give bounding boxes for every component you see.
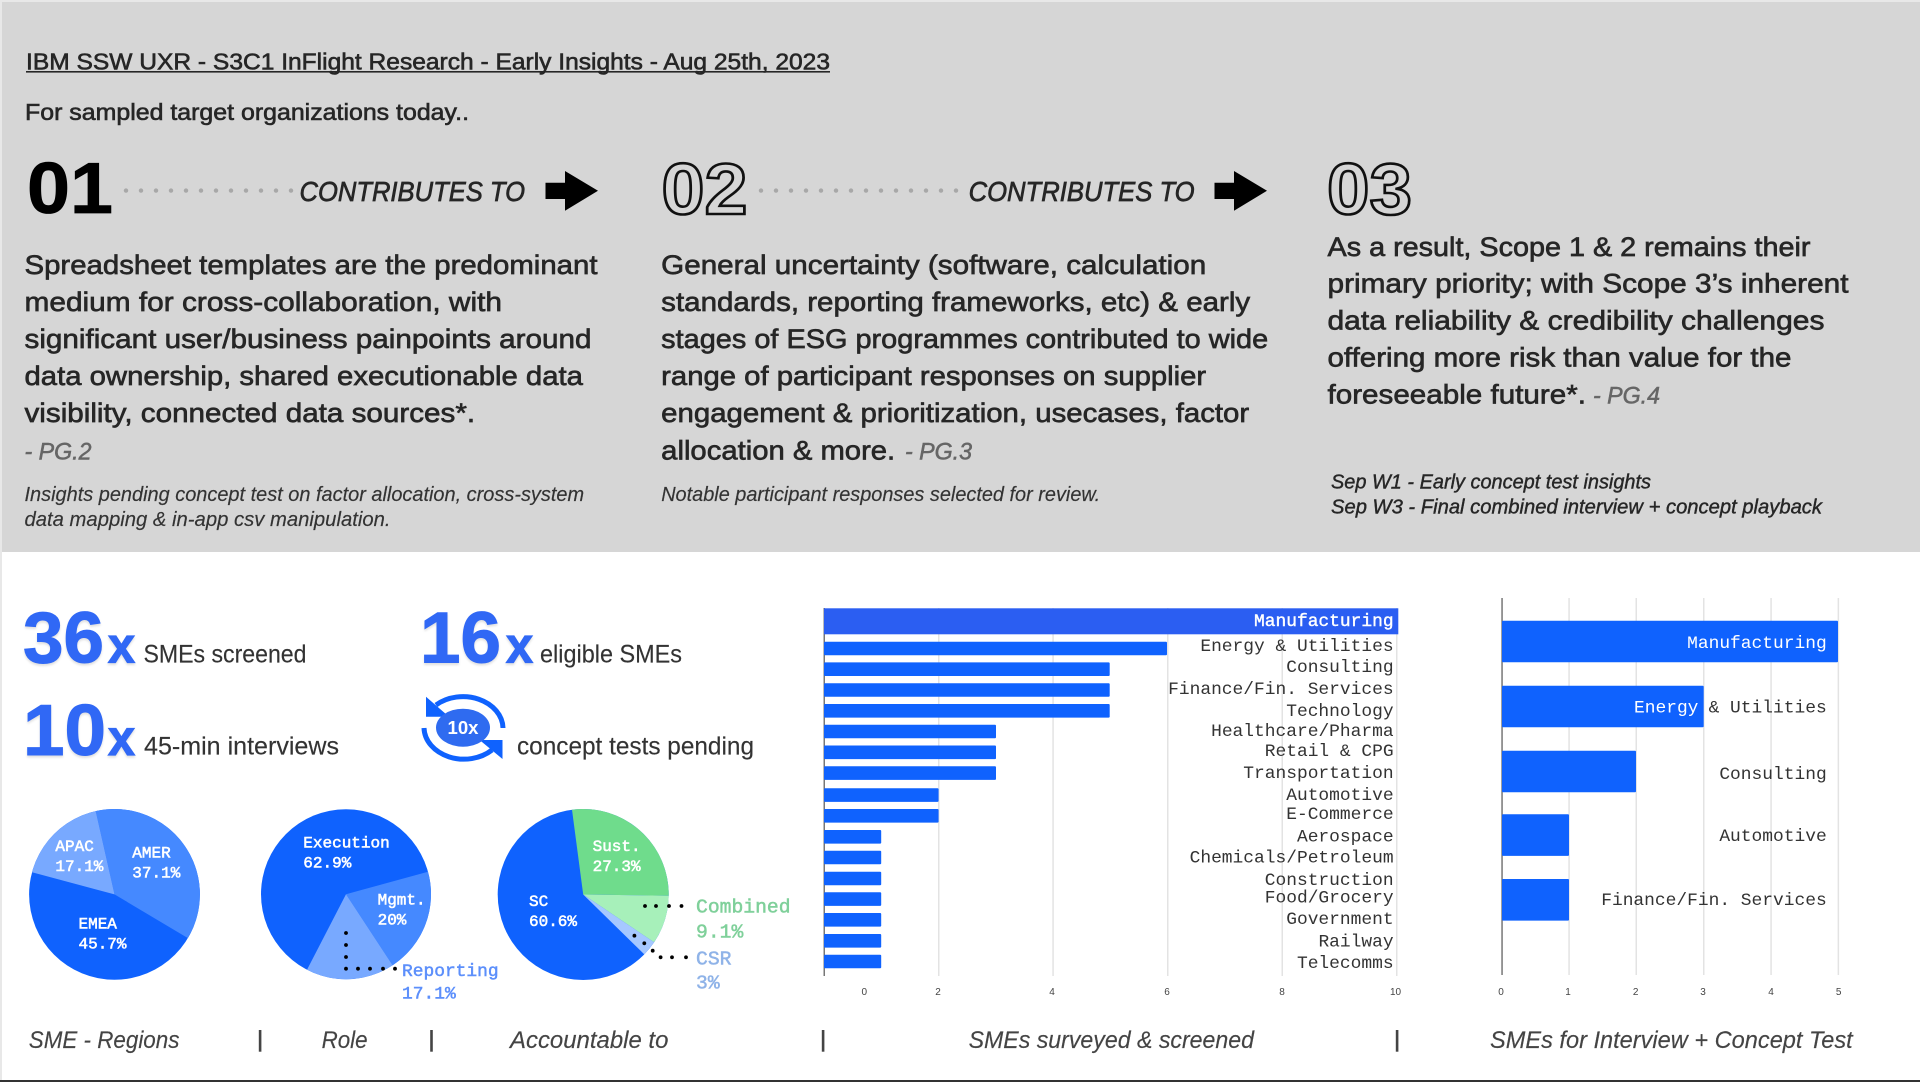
- bar chart: SMEs for interview and concept test: Manufacturing: [1687, 634, 1827, 654]
- step 02 body: range of participant responses on supplier: [661, 361, 1206, 391]
- bar chart: SMEs surveyed and screened: Construction: [1265, 871, 1394, 891]
- step 03 body: data reliability & credibility challenges: [1328, 306, 1824, 336]
- panel: key insights: [2, 2, 1920, 552]
- step 01 note: [24, 484, 584, 531]
- bar chart: SMEs for interview and concept test: 2: [1633, 987, 1639, 998]
- bar chart: SMEs surveyed and screened: Energy & Utilities: [1200, 637, 1394, 657]
- pie chart: role: [261, 809, 499, 1004]
- pie chart: accountable to: [498, 809, 791, 994]
- pie chart: role: Reporting: [402, 962, 499, 982]
- step 01 body: [24, 250, 598, 466]
- stat: interviews: 45-min interviews: [144, 732, 339, 760]
- bar chart: SMEs surveyed and screened: 6: [1164, 987, 1170, 998]
- stat: interviews: x: [108, 710, 135, 766]
- contributes to label: CONTRIBUTES TO: [300, 176, 525, 207]
- bar chart: SMEs surveyed and screened: Government: [1286, 910, 1394, 930]
- number 02: 02: [662, 150, 748, 230]
- pie chart: SME regions: EMEA: [78, 915, 117, 933]
- step 02 body: stages of ESG programmes contributed to wide: [661, 324, 1268, 354]
- step 01 header: [27, 149, 598, 229]
- bar chart: SMEs surveyed and screened: Railway: [1318, 932, 1394, 952]
- pie chart: role: 62.9%: [303, 854, 352, 872]
- chart captions: SMEs for Interview + Concept Test: [1490, 1027, 1854, 1054]
- step 01 body: significant user/business painpoints around: [24, 324, 592, 354]
- bar chart: SMEs for interview and concept test: [1498, 598, 1842, 998]
- bar chart: SMEs surveyed and screened: 4: [1049, 987, 1055, 998]
- chart captions: Role: [322, 1027, 368, 1054]
- step 02 body: General uncertainty (software, calculation: [661, 250, 1206, 280]
- pie chart: SME regions: AMER: [132, 844, 171, 862]
- step 01 note: Insights pending concept test on factor allocation, cross-system: [24, 484, 584, 506]
- step 02 body: - PG.3: [905, 438, 973, 466]
- step 02 body: engagement & prioritization, usecases, factor: [661, 398, 1249, 428]
- chart captions: [29, 1027, 1854, 1054]
- bar chart: SMEs surveyed and screened: E-Commerce: [1286, 805, 1394, 825]
- stat: SMEs screened: [23, 599, 306, 679]
- stat: eligible SMEs: 16: [420, 599, 501, 679]
- stat: SMEs screened: SMEs screened: [144, 640, 306, 668]
- bar chart: SMEs surveyed and screened: 8: [1279, 987, 1285, 998]
- pie chart: accountable to: 27.3%: [593, 858, 641, 876]
- pie chart: SME regions: 45.7%: [78, 935, 127, 953]
- bar chart: SMEs surveyed and screened: Consulting: [1286, 658, 1394, 678]
- pie chart: accountable to: 3%: [696, 972, 720, 994]
- stat: eligible SMEs: x: [506, 618, 533, 674]
- bar chart: SMEs for interview and concept test: Finance/Fin. Services: [1601, 891, 1827, 911]
- step 01 body: - PG.2: [24, 438, 92, 466]
- bar chart: SMEs surveyed and screened: 0: [862, 987, 868, 998]
- pie chart: role: Mgmt.: [378, 891, 426, 909]
- bar chart: SMEs for interview and concept test: 3: [1700, 987, 1706, 998]
- pie chart: role: 17.1%: [402, 984, 456, 1004]
- bar chart: SMEs surveyed and screened: Food/Grocery: [1265, 888, 1394, 908]
- icon: arrow: [546, 171, 598, 211]
- pie chart: accountable to: Sust.: [593, 838, 641, 856]
- bar chart: SMEs surveyed and screened: Aerospace: [1297, 827, 1394, 847]
- bar chart: SMEs for interview and concept test: & Utilities: [1709, 698, 1827, 718]
- step 03 body: offering more risk than value for the: [1328, 343, 1792, 373]
- stat: interviews: [23, 691, 339, 771]
- pie chart: SME regions: 17.1%: [55, 858, 104, 876]
- bar chart: SMEs for interview and concept test: 4: [1768, 987, 1774, 998]
- stat: SMEs screened: x: [108, 618, 135, 674]
- stat: concept tests: concept tests pending: [517, 732, 754, 760]
- stat: eligible SMEs: [420, 599, 682, 679]
- bar chart: SMEs surveyed and screened: Telecomms: [1297, 954, 1394, 974]
- step 02 body: [661, 250, 1268, 466]
- subtitle: For sampled target organizations today..: [25, 99, 469, 125]
- timeline note: [1331, 472, 1823, 518]
- bar chart: SMEs for interview and concept test: 1: [1565, 987, 1571, 998]
- chart captions: SME - Regions: [29, 1027, 179, 1054]
- bar chart: SMEs for interview and concept test: Consulting: [1719, 765, 1827, 785]
- bar chart: SMEs surveyed and screened: 10: [1390, 987, 1401, 998]
- bar chart: SMEs for interview and concept test: 5: [1836, 987, 1842, 998]
- number 01: 01: [27, 149, 113, 229]
- bar chart: SMEs surveyed and screened: Chemicals/Petroleum: [1190, 848, 1394, 868]
- step 01 note: data mapping & in-app csv manipulation.: [24, 509, 390, 531]
- highlighted bar: manufacturing: Manufacturing: [1254, 612, 1394, 632]
- step 02 body: allocation & more.: [661, 436, 895, 466]
- pie chart: SME regions: [29, 809, 200, 980]
- pie chart: accountable to: CSR: [696, 948, 732, 970]
- step 02 header: [662, 150, 1267, 230]
- step 01 body: medium for cross-collaboration, with: [24, 287, 502, 317]
- contributes to label: CONTRIBUTES TO: [969, 176, 1195, 207]
- pie chart: accountable to: Combined: [696, 896, 791, 918]
- step 01 body: Spreadsheet templates are the predominant: [24, 250, 598, 280]
- bar chart: SMEs for interview and concept test: 0: [1498, 987, 1504, 998]
- chart captions: SMEs surveyed & screened: [969, 1027, 1255, 1054]
- step 03 body: [1328, 232, 1849, 410]
- step 02 note: Notable participant responses selected for review.: [661, 484, 1100, 506]
- number 03: 03: [1327, 150, 1412, 230]
- pie chart: role: 20%: [378, 911, 407, 929]
- pie chart: role: Execution: [303, 835, 390, 853]
- pie chart: SME regions: APAC: [55, 838, 94, 856]
- pie chart: SME regions: 37.1%: [132, 864, 181, 882]
- bar chart: SMEs for interview and concept test: Automotive: [1719, 827, 1827, 847]
- bar chart: SMEs surveyed and screened: Healthcare/Pharma: [1211, 722, 1394, 742]
- pie chart: accountable to: 60.6%: [529, 913, 577, 931]
- bar chart: SMEs surveyed and screened: 2: [935, 987, 941, 998]
- title: IBM SSW UXR - S3C1 InFlight Research - Early Insights - Aug 25th, 2023: [26, 48, 830, 74]
- step 03 body: primary priority; with Scope 3’s inherent: [1328, 269, 1849, 299]
- step 02 body: standards, reporting frameworks, etc) & early: [661, 287, 1251, 317]
- bar chart: SMEs surveyed and screened: Retail & CPG: [1265, 742, 1394, 762]
- step 01 body: data ownership, shared executionable data: [24, 361, 584, 391]
- step 03 body: As a result, Scope 1 & 2 remains their: [1328, 232, 1811, 262]
- icon: refresh cycle: 10x: [448, 718, 478, 738]
- highlighted bar: manufacturing: [824, 608, 1398, 634]
- stat: interviews: 10: [23, 691, 106, 771]
- bar chart: SMEs surveyed and screened: Technology: [1286, 702, 1394, 722]
- bar chart: SMEs surveyed and screened: Finance/Fin. Services: [1168, 680, 1394, 700]
- step 03 body: foreseeable future*.: [1328, 380, 1586, 410]
- bar chart: SMEs surveyed and screened: Automotive: [1286, 786, 1394, 806]
- icon: refresh cycle: [424, 697, 503, 759]
- bar chart: SMEs surveyed and screened: [824, 608, 1401, 998]
- pie chart: accountable to: 9.1%: [696, 922, 743, 944]
- stat: eligible SMEs: eligible SMEs: [540, 640, 682, 668]
- bar chart: SMEs surveyed and screened: Transportation: [1243, 764, 1394, 784]
- icon: arrow: [1214, 171, 1267, 211]
- timeline note: Sep W3 - Final combined interview + concept playback: [1331, 496, 1823, 518]
- chart captions: Accountable to: [508, 1027, 668, 1054]
- stat: concept tests: [424, 697, 754, 760]
- bar chart: SMEs for interview and concept test: Energy: [1634, 698, 1699, 718]
- timeline note: Sep W1 - Early concept test insights: [1331, 472, 1651, 494]
- stat: SMEs screened: 36: [23, 599, 104, 679]
- step 03 body: - PG.4: [1593, 383, 1660, 410]
- step 01 body: visibility, connected data sources*.: [24, 398, 475, 428]
- pie chart: accountable to: SC: [529, 893, 548, 911]
